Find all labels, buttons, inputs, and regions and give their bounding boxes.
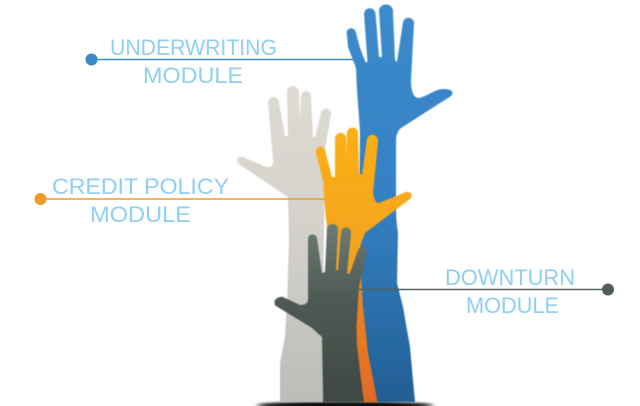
callout: downturn module: DOWNTURN (445, 265, 575, 290)
callout: underwriting module: MODULE (143, 63, 243, 88)
callout: credit policy module (34, 174, 325, 227)
hand: dark grey downturn (274, 224, 367, 402)
hand: orange credit policy (316, 127, 412, 320)
callout: underwriting module (86, 35, 356, 88)
ground shadow (257, 402, 433, 406)
callout: underwriting module: UNDERWRITING (110, 35, 277, 60)
callout: credit policy module: CREDIT POLICY (52, 174, 229, 199)
hand: blue underwriting (347, 4, 453, 402)
callout: credit policy module: MODULE (90, 202, 191, 227)
arm strip: orange lower forearm (355, 268, 378, 402)
callout: downturn module (358, 265, 614, 318)
callout: downturn module: MODULE (466, 293, 559, 318)
hand: beige credit (237, 86, 331, 402)
